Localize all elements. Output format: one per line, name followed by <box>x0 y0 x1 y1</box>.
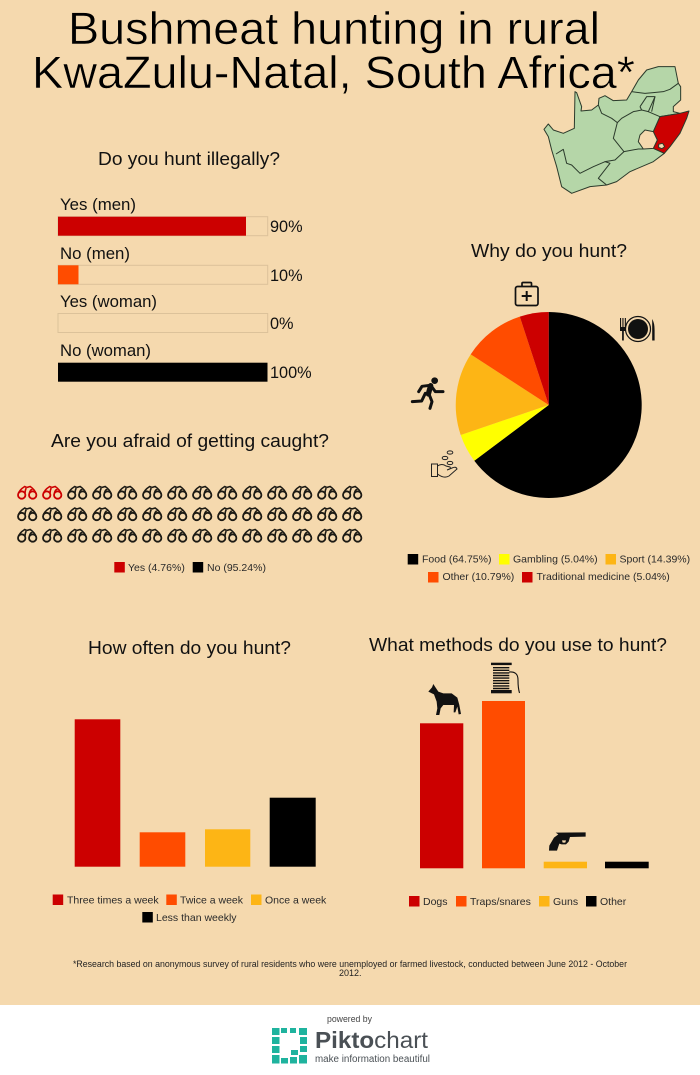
icon: medical kit <box>516 282 538 306</box>
icon: dog <box>428 684 461 715</box>
map: South Africa with KwaZulu-Natal highlighted <box>544 67 689 193</box>
legend: reasons for hunting: Traditional medicine (5.04%) <box>536 571 670 583</box>
bar chart: hunting illegally: 0% <box>270 315 294 333</box>
pictogram: handcuffs <box>18 486 361 542</box>
piktochart wordmark: Piktochart <box>315 1027 428 1053</box>
bar chart: hunting illegally: No (men) <box>60 245 130 263</box>
heading: hunting methods: What methods do you use to hunt? <box>369 635 667 655</box>
legend: hunting methods: Dogs <box>423 896 448 908</box>
legend: hunting methods: Traps/snares <box>470 896 531 908</box>
bar chart: hunting methods <box>420 701 649 868</box>
legend: afraid of getting caught: No (95.24%) <box>207 562 266 574</box>
bar chart: hunting illegally: 100% <box>270 364 312 382</box>
legend: hunting methods: Guns <box>553 896 578 908</box>
title: Bushmeat hunting in rural <box>68 3 600 54</box>
legend: reasons for hunting: Other (10.79%) <box>442 571 514 583</box>
footer credit: powered by <box>327 1014 372 1024</box>
bar chart: hunting illegally <box>58 196 312 382</box>
piktochart wordmark: make information beautiful <box>315 1054 430 1065</box>
footer panel <box>0 1005 700 1075</box>
heading: why do you hunt: Why do you hunt? <box>471 241 627 261</box>
bar chart: hunting illegally: Yes (men) <box>60 196 136 214</box>
footnote <box>73 959 627 978</box>
legend: reasons for hunting: Food (64.75%) <box>422 554 491 566</box>
legend: hunting methods: Other <box>600 896 627 908</box>
legend: hunting frequency: Once a week <box>265 894 327 906</box>
icon: plate and cutlery <box>620 316 655 342</box>
legend: hunting frequency <box>53 894 327 924</box>
footnote: 2012. <box>339 968 362 978</box>
icon: hand with coins <box>432 451 457 477</box>
icon: revolver <box>549 832 586 851</box>
legend: afraid of getting caught <box>114 562 266 574</box>
legend: reasons for hunting: Gambling (5.04%) <box>513 554 598 566</box>
heading: do you hunt illegally: Do you hunt illegally? <box>98 149 280 169</box>
icon: thread spool <box>491 663 520 693</box>
title: KwaZulu-Natal, South Africa* <box>32 47 635 98</box>
bar chart: hunting illegally: 10% <box>270 267 303 285</box>
bar chart: hunting frequency <box>75 719 316 867</box>
piktochart logo mark <box>272 1028 307 1064</box>
heading: how often do you hunt: How often do you hunt? <box>88 638 291 658</box>
legend: afraid of getting caught: Yes (4.76%) <box>128 562 185 574</box>
pie chart: reasons for hunting <box>456 312 642 498</box>
bar chart: hunting illegally: 90% <box>270 218 303 236</box>
bar chart: hunting illegally: Yes (woman) <box>60 293 157 311</box>
bar chart: hunting illegally: No (woman) <box>60 342 151 360</box>
piktochart wordmark <box>315 1027 430 1065</box>
icon: running figure <box>412 377 443 408</box>
title <box>32 3 635 98</box>
legend: reasons for hunting: Sport (14.39%) <box>620 554 690 566</box>
legend: hunting frequency: Twice a week <box>180 894 244 906</box>
footnote: *Research based on anonymous survey of rural residents who were unemployed or farmed livestock, conducted between June 2012 - October <box>73 959 627 969</box>
legend: hunting frequency: Three times a week <box>67 894 159 906</box>
legend: hunting methods <box>409 896 627 908</box>
legend: hunting frequency: Less than weekly <box>156 912 237 924</box>
legend: reasons for hunting <box>408 554 690 583</box>
heading: afraid of getting caught: Are you afraid of getting caught? <box>51 431 329 451</box>
